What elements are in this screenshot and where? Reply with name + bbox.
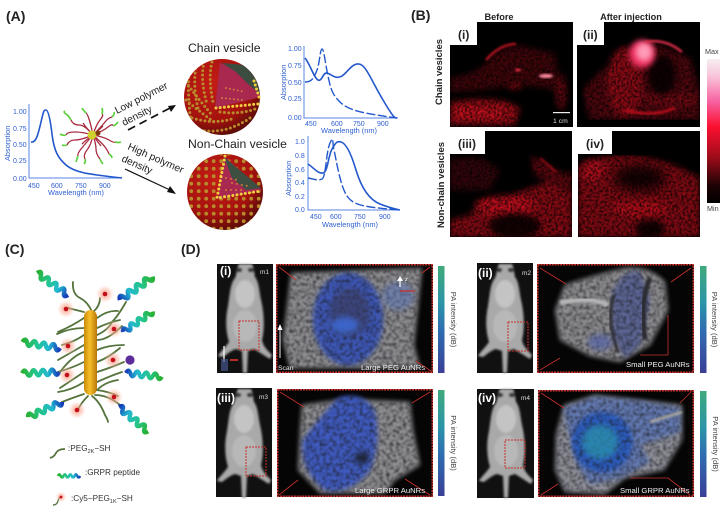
chart: non-chain vesicle absorption: 450 xyxy=(310,214,322,221)
chart: chain vesicle absorption: 600 xyxy=(331,121,343,128)
chart: chain vesicle absorption: 0.50 xyxy=(288,80,302,87)
chart: chain vesicle absorption: 900 xyxy=(377,121,389,128)
chart: micelle absorption spectrum: 0.50 xyxy=(13,142,27,149)
chart: chain vesicle absorption: 0.00 xyxy=(288,115,302,122)
legend: PEG: 2K xyxy=(88,449,95,455)
arrow: dashed to chain vesicle xyxy=(128,105,176,130)
label: iii: (iii) xyxy=(458,137,476,151)
chart: micelle absorption spectrum: 0.00 xyxy=(13,176,27,183)
chart: micelle absorption spectrum: 0.75 xyxy=(13,126,27,133)
icon: polymer micelle xyxy=(60,108,121,164)
heading: chain vesicle: Chain vesicle xyxy=(188,41,261,55)
group: D i xyxy=(217,264,458,373)
GRPR helices xyxy=(35,271,70,297)
PA scan: large PEG: Large PEG AuNRs xyxy=(361,363,425,372)
diagram: nanorod with ligands xyxy=(22,271,162,434)
mouse photo m3: m3 xyxy=(259,394,268,401)
purple marker xyxy=(125,355,135,365)
colorbar: PA intensity (dB) xyxy=(711,416,720,472)
Cy5 dyes xyxy=(96,285,114,303)
legend: Cy5: :Cy5−PEG xyxy=(71,494,110,503)
chart: chain vesicle absorption: Absorption xyxy=(279,65,288,100)
label: i: (i) xyxy=(458,28,469,42)
mouse photo m3: (iii) xyxy=(217,391,235,405)
gold rod xyxy=(84,310,97,395)
text: low polymer density: Low polymer xyxy=(113,80,170,117)
colorbar xyxy=(700,266,719,373)
chart: chain vesicle absorption: 0.25 xyxy=(288,96,302,103)
PA scan: large PEG: z xyxy=(404,277,408,283)
image: iii xyxy=(450,131,572,238)
chart: chain vesicle absorption: 1.00 xyxy=(288,46,302,53)
heading: before: Before xyxy=(484,12,514,22)
mouse photo m4: m4 xyxy=(521,395,530,402)
chart: micelle absorption spectrum: 1.00 xyxy=(13,109,27,116)
colorbar: max to min: Max xyxy=(705,47,719,56)
heading: after injection: After injection xyxy=(600,12,662,22)
mouse photo m1 xyxy=(217,264,273,373)
panel: D in vivo PA imaging xyxy=(181,241,720,498)
chart: micelle absorption spectrum: 0.25 xyxy=(13,158,27,165)
image: iv xyxy=(578,131,700,238)
mouse photo m2: m2 xyxy=(522,270,531,277)
heading: non-chain vesicle: Non-Chain vesicle xyxy=(188,137,287,151)
colorbar xyxy=(700,391,720,497)
chart: micelle absorption spectrum: 600 xyxy=(51,183,63,190)
PA scan: small GRPR xyxy=(538,390,694,497)
chart: non-chain vesicle absorption: Absorption xyxy=(284,161,293,196)
PA scan: small GRPR: Small GRPR AuNRs xyxy=(620,486,690,495)
chart: non-chain vesicle absorption: 0.6 xyxy=(295,167,305,174)
PA scan: small PEG: Small PEG AuNRs xyxy=(626,360,690,369)
chart: non-chain vesicle absorption: 750 xyxy=(354,214,366,221)
label B: (B) xyxy=(411,7,430,23)
group: D iii xyxy=(216,388,458,498)
panel: A vesicle synthesis and absorption xyxy=(3,8,400,230)
chart: micelle absorption spectrum: 750 xyxy=(75,183,87,190)
chart: chain vesicle absorption: 750 xyxy=(353,121,365,128)
chart: non-chain vesicle absorption: 0.4 xyxy=(295,180,305,187)
chart: chain vesicle absorption: 450 xyxy=(305,121,317,128)
label: ii: (ii) xyxy=(583,28,598,42)
text: high polymer density: density xyxy=(120,154,155,177)
chart: non-chain vesicle absorption: 1.0 xyxy=(295,139,305,146)
scale bar: 1 cm: 1 cm xyxy=(553,118,568,125)
group: D ii xyxy=(477,263,719,373)
chart: non-chain vesicle absorption: Wavelength (nm) xyxy=(322,220,378,229)
chart: micelle absorption spectrum xyxy=(3,104,122,197)
image: i xyxy=(450,22,573,127)
chart: chain vesicle absorption: 0.75 xyxy=(288,63,302,70)
icon: non-chain vesicle sphere xyxy=(187,154,263,230)
legend: GRPR: :GRPR peptide xyxy=(85,468,141,477)
colorbar: PA intensity (dB) xyxy=(449,292,458,348)
colorbar: PA intensity (dB) xyxy=(710,292,719,348)
chart: micelle absorption spectrum: 450 xyxy=(28,183,40,190)
chart: non-chain vesicle absorption: 0.0 xyxy=(295,207,305,214)
mouse photo m2 xyxy=(477,263,533,373)
legend: Cy5: 1K xyxy=(110,499,117,505)
legend: PEG: :PEG xyxy=(68,444,88,453)
PA scan: large GRPR xyxy=(277,389,433,497)
icon: chain vesicle sphere xyxy=(184,59,261,135)
legend: PEG: −SH xyxy=(94,444,111,453)
chart: non-chain vesicle absorption: 900 xyxy=(379,214,391,221)
label C: (C) xyxy=(5,241,24,257)
chart: micelle absorption spectrum: 900 xyxy=(99,183,111,190)
mouse photo m4 xyxy=(477,389,534,498)
colorbar xyxy=(438,390,458,496)
chart: micelle absorption spectrum: Wavelength (nm) xyxy=(48,188,104,197)
chart: non-chain vesicle absorption: 600 xyxy=(330,214,342,221)
legend: Cy5 xyxy=(53,492,133,505)
colorbar: PA intensity (dB) xyxy=(449,415,458,471)
label A: (A) xyxy=(6,8,25,24)
mouse photo m1: m1 xyxy=(260,269,269,276)
PA scan: large PEG xyxy=(276,264,433,373)
mouse photo m4: (iv) xyxy=(478,391,496,405)
mouse photo m3 xyxy=(216,388,272,498)
chart: non-chain vesicle absorption xyxy=(284,136,400,229)
PEG chains xyxy=(57,282,126,422)
PA scan: small PEG xyxy=(537,264,694,373)
text: low polymer density: density xyxy=(120,104,155,129)
chart: chain vesicle absorption xyxy=(279,46,398,135)
mouse photo m1: (i) xyxy=(220,264,231,278)
PA scan: large PEG: Scan xyxy=(278,365,294,372)
colorbar: max to min xyxy=(705,47,720,213)
label D: (D) xyxy=(181,241,200,257)
image: ii xyxy=(577,22,700,127)
label: iv: (iv) xyxy=(586,137,604,151)
colorbar: max to min: Min xyxy=(707,204,719,213)
text: high polymer density: High polymer xyxy=(126,142,186,176)
panel: B photoacoustic images xyxy=(411,7,720,238)
legend: GRPR xyxy=(58,468,141,478)
row label: chain vesicles: Chain vesicles xyxy=(434,39,445,105)
colorbar xyxy=(438,266,458,373)
group: D iv xyxy=(477,389,720,498)
chart: non-chain vesicle absorption: 0.2 xyxy=(295,194,305,201)
row label: non-chain vesicles: Non-chain vesicles xyxy=(436,142,447,228)
panel: C functionalised gold nanorod xyxy=(5,241,162,505)
chart: micelle absorption spectrum: Absorption xyxy=(3,126,12,161)
mouse photo m2: (ii) xyxy=(478,266,493,280)
chart: non-chain vesicle absorption: 0.8 xyxy=(295,153,305,160)
legend: PEG xyxy=(50,444,111,458)
legend: Cy5: −SH xyxy=(117,494,133,503)
PA scan: large GRPR: Large GRPR AuNRs xyxy=(355,486,425,495)
chart: chain vesicle absorption: Wavelength (nm) xyxy=(321,126,377,135)
arrow: solid to non-chain vesicle xyxy=(125,169,176,194)
